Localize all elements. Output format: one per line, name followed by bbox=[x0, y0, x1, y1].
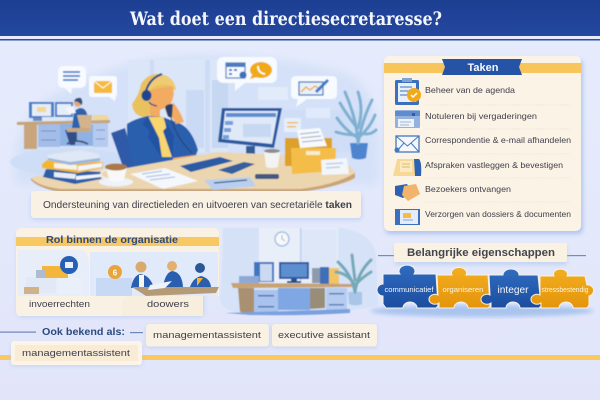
illustration: office desk bbox=[220, 228, 378, 315]
mug bbox=[264, 149, 283, 168]
puzzle piece: communicatief bbox=[377, 265, 438, 308]
task: afspraken bbox=[393, 159, 563, 176]
tag: managementassistent bbox=[146, 324, 269, 348]
tag: managementassistent: managementassistent bbox=[153, 330, 261, 341]
label: doowers: doowers bbox=[147, 299, 190, 309]
caption: ondersteuning bbox=[31, 191, 362, 220]
task: notuleren bbox=[395, 110, 537, 128]
puzzle piece: communicatief: communicatief bbox=[384, 285, 434, 294]
typing hand bbox=[173, 155, 207, 167]
plant bbox=[336, 92, 376, 160]
panel: taken bbox=[384, 56, 583, 234]
section: ook bekend als bbox=[0, 324, 600, 366]
monitor bbox=[218, 108, 282, 158]
tag: managementassistent highlighted: managementassistent bbox=[22, 348, 130, 359]
puzzle piece: organiseren bbox=[429, 268, 490, 308]
hero illustration: secretary at desk bbox=[10, 55, 379, 192]
tag: executive assistant: executive assistant bbox=[278, 330, 370, 341]
keyboard and mouse pad bbox=[180, 157, 279, 179]
task: dossiers bbox=[395, 209, 571, 225]
heading ribbon: taken bbox=[442, 59, 522, 75]
label: invoerrechten bbox=[18, 296, 119, 316]
panel: rol binnen de organisatie bbox=[16, 228, 219, 317]
heading: belangrijke eigenschappen: Belangrijke eigenschappen bbox=[407, 247, 555, 259]
title banner bbox=[0, 0, 600, 40]
phone and raised hand bbox=[164, 103, 177, 118]
title banner: Wat doet een directiesecretaresse? bbox=[129, 8, 442, 30]
puzzle piece: integer: integer bbox=[498, 285, 529, 296]
label: invoerrechten: invoerrechten bbox=[29, 299, 90, 309]
desk bbox=[31, 152, 355, 191]
tag: managementassistent highlighted bbox=[11, 341, 142, 366]
caption: ondersteuning: Ondersteuning van directieleden en uitvoeren van secretariële taken bbox=[43, 200, 352, 211]
puzzle piece: integer bbox=[481, 269, 541, 308]
blouse bbox=[148, 117, 172, 157]
heading ribbon: taken: Taken bbox=[468, 62, 499, 74]
speech bubbles bbox=[58, 57, 337, 107]
task: bezoekers bbox=[395, 184, 511, 201]
tag: executive assistant bbox=[272, 324, 377, 348]
jacket bbox=[127, 116, 198, 168]
task: afspraken: Afspraken vastleggen & bevestigen bbox=[425, 160, 563, 170]
task: correspondentie: Correspondentie & e-mail afhandelen bbox=[425, 135, 571, 145]
accent line bbox=[0, 355, 600, 360]
image: files and folders bbox=[18, 250, 89, 296]
image: meeting: 6 bbox=[113, 268, 118, 278]
task: notuleren: Notuleren bij vergaderingen bbox=[425, 111, 537, 121]
face and neck bbox=[150, 86, 174, 119]
documents on desk bbox=[130, 168, 256, 190]
puzzle piece: organiseren: organiseren bbox=[442, 285, 484, 294]
stacked books bbox=[42, 150, 103, 184]
heading: rol: Rol binnen de organisatie bbox=[46, 235, 178, 246]
label: doowers bbox=[122, 296, 203, 316]
folders with papers bbox=[285, 128, 349, 175]
coffee cup bbox=[99, 164, 133, 186]
puzzle piece: stressbestendig bbox=[531, 269, 594, 308]
hair bbox=[132, 74, 176, 117]
puzzle: eigenschappen bbox=[370, 265, 594, 317]
task: agenda: Beheer van de agenda bbox=[425, 85, 515, 95]
label: Ook bekend als: bbox=[42, 326, 125, 338]
heading: belangrijke eigenschappen bbox=[378, 243, 586, 265]
headset bbox=[146, 74, 162, 91]
task: bezoekers: Bezoekers ontvangen bbox=[425, 184, 511, 194]
puzzle piece: stressbestendig: stressbestendig bbox=[542, 287, 589, 294]
task: agenda bbox=[395, 78, 515, 105]
image: meeting bbox=[90, 252, 219, 296]
secretary bbox=[127, 74, 207, 168]
task: dossiers: Verzorgen van dossiers & documenten bbox=[425, 209, 571, 219]
background colleague at small desk bbox=[17, 98, 110, 149]
office backdrop bbox=[10, 55, 379, 185]
chair bbox=[111, 128, 137, 170]
lapels bbox=[142, 116, 162, 158]
task: correspondentie bbox=[394, 135, 571, 152]
